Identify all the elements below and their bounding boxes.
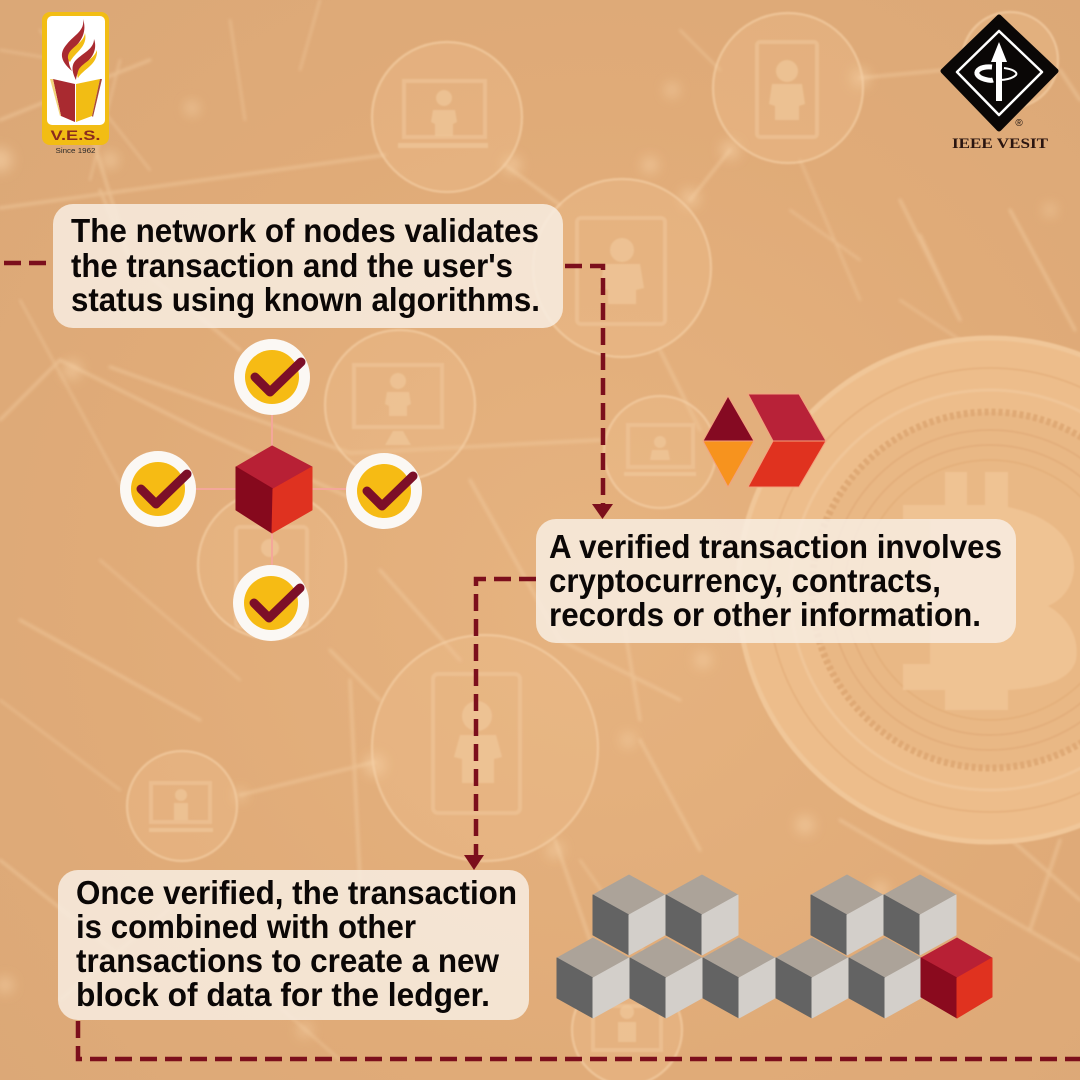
icon: check right <box>346 453 422 529</box>
text box: step two <box>536 519 1016 643</box>
text box: step three: Once verified, the transaction <box>76 874 517 911</box>
network node: monitor middle <box>325 330 475 480</box>
icon: open book <box>50 79 102 122</box>
network node: laptop top centre <box>372 42 522 192</box>
icon: red cube <box>236 446 312 533</box>
network node: phone top right <box>713 13 863 163</box>
bitcoin coin background <box>738 338 1080 842</box>
network node: behind IEEE logo <box>962 12 1058 108</box>
network node: small laptop <box>127 751 237 861</box>
logo: V.E.S. <box>42 12 109 155</box>
text box: step two: records or other information. <box>549 596 981 633</box>
connecting spokes <box>192 410 350 570</box>
text box: step three: transactions to create a new <box>76 942 499 979</box>
text box: step one: the transaction and the user's <box>71 247 513 284</box>
text box: step three: is combined with other <box>76 908 416 945</box>
icon: flames <box>62 19 97 80</box>
network node: laptop by arrows <box>604 396 716 508</box>
text box: step one: status using known algorithms. <box>71 281 540 318</box>
icon: diamond and chevron <box>703 394 826 487</box>
network node: phone left centre <box>198 491 346 639</box>
validation diagram <box>120 339 422 641</box>
logo: IEEE VESIT <box>943 17 1056 152</box>
text box: step one <box>53 204 563 328</box>
logo: V.E.S.: Since 1962 <box>56 148 96 155</box>
connector: step two to step three <box>464 579 536 870</box>
network node: bottom laptop <box>572 975 682 1080</box>
network node: large phone <box>372 635 598 861</box>
block chain cubes <box>557 875 992 1018</box>
connector: incoming to step one <box>0 261 52 265</box>
text box: step three: block of data for the ledger. <box>76 976 490 1013</box>
text box: step three <box>58 870 529 1020</box>
logo: IEEE VESIT: ® <box>1015 118 1023 129</box>
icon: bitcoin symbol <box>903 472 1077 710</box>
text box: step two: cryptocurrency, contracts, <box>549 562 941 599</box>
logo: IEEE VESIT: IEEE VESIT <box>952 136 1048 152</box>
icon: check top <box>234 339 310 415</box>
icon: check bottom <box>233 565 309 641</box>
connector: step three outgoing <box>78 1021 1080 1059</box>
network node: tablet <box>533 179 711 357</box>
icon: new red block <box>921 938 992 1018</box>
connector: step one to step two <box>565 266 613 519</box>
text box: step two: A verified transaction involves <box>549 528 1002 565</box>
logo: V.E.S.: V.E.S. <box>50 127 100 143</box>
icon: check left <box>120 451 196 527</box>
text box: step one: The network of nodes validates <box>71 212 539 249</box>
